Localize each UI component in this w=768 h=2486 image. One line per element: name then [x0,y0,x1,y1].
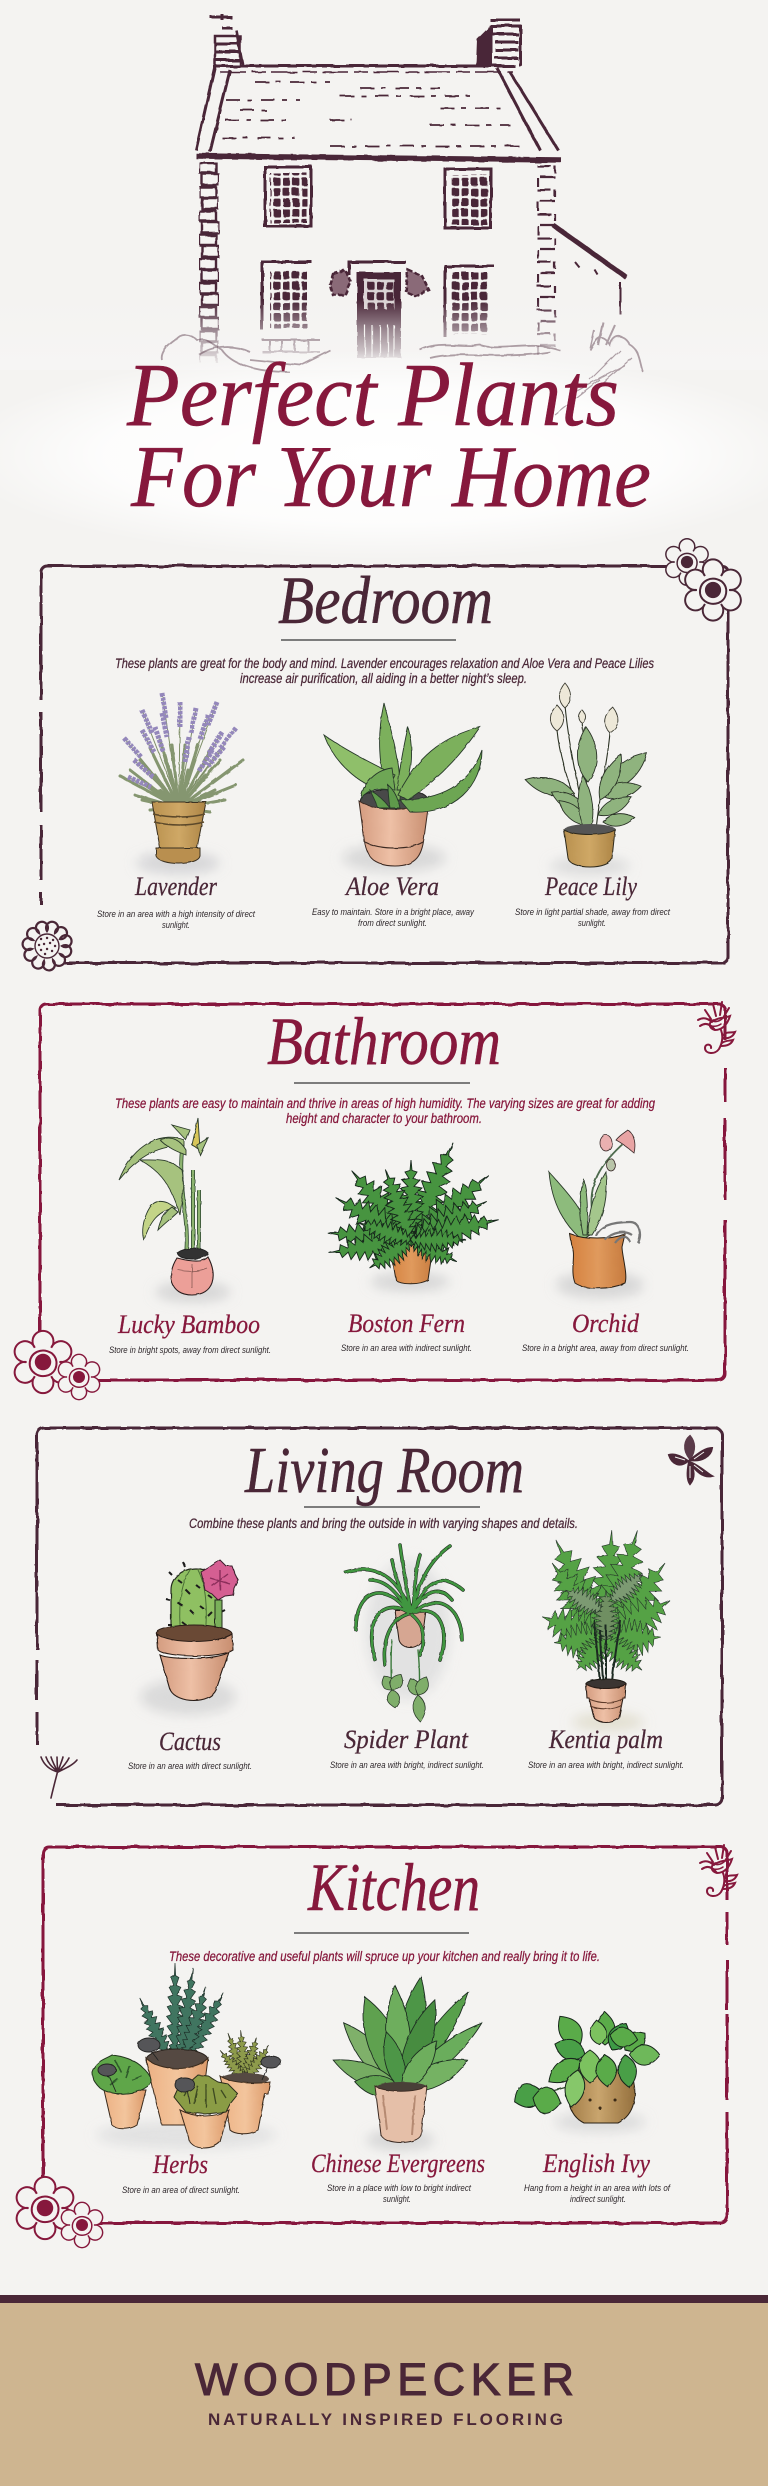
panel: kitchen [17,1845,737,2248]
text: bedroom intro: These plants are great for the body and mind. Lavender encourages relaxation and Aloe Vera and Peace Lilies [115,656,654,671]
main title: For Your Home [130,429,651,526]
text: cactus label [128,1727,252,1772]
text: lucky bamboo label: Store in bright spots, away from direct sunlight. [109,1345,271,1356]
panel: bedroom [23,539,741,970]
plant: herbs [92,1963,281,2149]
plant: orchid [549,1130,644,1298]
text: spider plant label: Store in an area with bright, indirect sunlight. [330,1760,484,1771]
plant: spider plant [346,1545,463,1722]
text: living room intro: Combine these plants and bring the outside in with varying shapes and details. [189,1516,578,1531]
icon: flowers [666,539,741,621]
text: lavender label [97,872,255,931]
text: kitchen intro: These decorative and useful plants will spruce up your kitchen and really bring it to life. [169,1949,600,1964]
main title [126,346,651,526]
text: chinese evergreens label [311,2149,485,2205]
panel: living room [37,1428,722,1805]
text: kentia palm label [528,1725,684,1771]
text: english ivy label: English Ivy [542,2149,650,2178]
icon: sprig [700,1845,737,1896]
icon: flowers [15,1331,100,1400]
plant: english ivy [509,2010,660,2132]
text: peace lily label [515,872,670,929]
text: english ivy label: indirect sunlight. [570,2194,626,2205]
illustration: garden bushes [162,322,643,415]
text: bathroom intro [115,1096,655,1126]
text: orchid label: Store in a bright area, away from direct sunlight. [522,1343,689,1354]
panel border [40,1004,725,1380]
icon: dandelion [41,1757,77,1798]
plant: lavender [120,693,243,874]
text: kentia palm label: Kentia palm [548,1725,663,1754]
text: cactus label: Cactus [159,1727,221,1756]
text: aloe vera label: Easy to maintain. Store in a bright place, away [312,907,475,918]
text: lavender label: sunlight. [162,920,190,931]
text: orchid label: Orchid [572,1309,640,1338]
panel border [43,1847,727,2223]
text: lavender label: Lavender [134,872,218,901]
text: spider plant label [330,1725,484,1771]
text: boston fern label [341,1309,472,1354]
text: bathroom intro: height and character to your bathroom. [286,1111,482,1126]
background glow behind title [0,350,768,560]
text: lucky bamboo label: Lucky Bamboo [117,1310,260,1339]
panel border [37,1428,722,1805]
text: kentia palm label: Store in an area with bright, indirect sunlight. [528,1760,684,1771]
text: spider plant label: Spider Plant [344,1725,469,1754]
text: cactus label: Store in an area with direct sunlight. [128,1761,252,1772]
text: herbs label [122,2150,240,2196]
illustration: house [0,14,768,370]
panel: bathroom [15,1002,735,1400]
text: english ivy label: Hang from a height in an area with lots of [524,2183,671,2194]
icon: sunflower [23,922,72,970]
text: boston fern label: Boston Fern [348,1309,465,1338]
footer band [0,2295,768,2486]
text: english ivy label [524,2149,671,2205]
icon: flowers [17,2177,103,2248]
tagline: NATURALLY INSPIRED FLOORING [208,2410,563,2429]
text: peace lily label: Store in light partial shade, away from direct [515,907,670,918]
main title: Perfect Plants [126,346,619,445]
text: aloe vera label: from direct sunlight. [358,918,427,929]
icon: sprig [698,1002,735,1053]
brand name: WOODPECKER [195,2354,574,2405]
plant: cactus [140,1560,238,1715]
text: bathroom intro: These plants are easy to maintain and thrive in areas of high humidity. The varying sizes are great for adding [115,1096,655,1111]
text: lucky bamboo label [109,1310,271,1356]
heading: bathroom: Bathroom [267,1003,501,1079]
heading: living room: Living Room [244,1434,524,1507]
text: boston fern label: Store in an area with indirect sunlight. [341,1343,472,1354]
plant: aloe vera [324,703,482,872]
text: peace lily label: sunlight. [578,918,606,929]
plant: kentia palm [535,1525,682,1731]
plant: lucky bamboo [119,1118,231,1302]
plant: boston fern [326,1137,502,1291]
text: aloe vera label [312,872,475,929]
plant: chinese evergreens [329,1974,488,2150]
icon: star flower [669,1436,712,1484]
heading: kitchen: Kitchen [307,1849,480,1925]
text: chinese evergreens label: sunlight. [383,2194,411,2205]
heading: bedroom: Bedroom [278,562,493,638]
text: bedroom intro: increase air purification, all aiding in a better night’s sleep. [240,671,527,686]
text: peace lily label: Peace Lily [544,872,637,901]
text: herbs label: Store in an area of direct sunlight. [122,2185,240,2196]
text: orchid label [522,1309,689,1354]
text: lavender label: Store in an area with a high intensity of direct [97,909,255,920]
text: aloe vera label: Aloe Vera [344,872,439,901]
plant: peace lily [524,683,653,875]
panel border [41,566,728,963]
text: bedroom intro [115,656,654,686]
text: chinese evergreens label: Store in a place with low to bright indirect [327,2183,471,2194]
text: herbs label: Herbs [152,2150,208,2179]
text: chinese evergreens label: Chinese Evergreens [311,2149,485,2178]
